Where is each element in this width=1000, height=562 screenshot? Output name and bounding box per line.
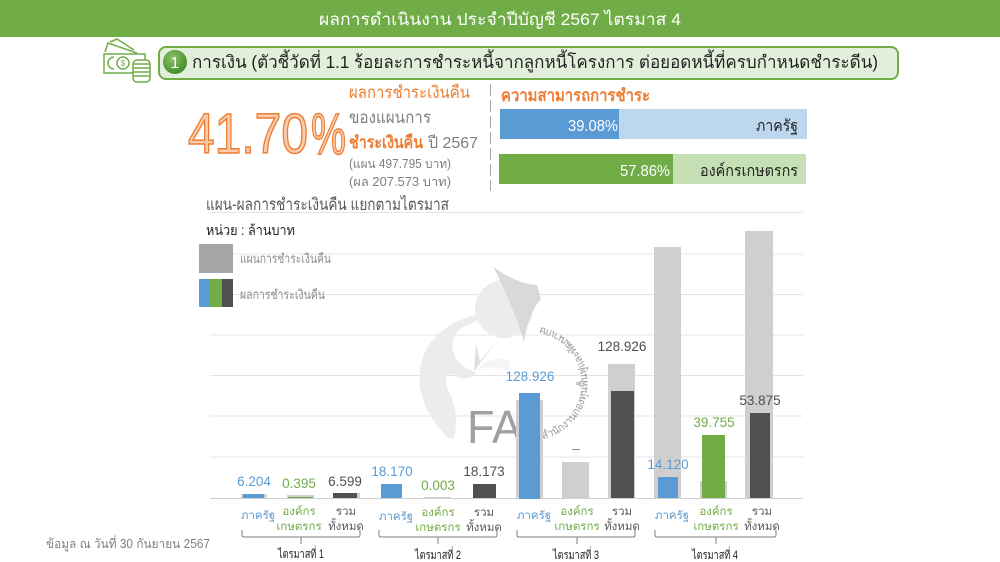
header banner [0, 0, 1000, 37]
bar chart: quarter 1: 6.204 [237, 474, 271, 489]
watermark logo [420, 266, 590, 453]
bar chart: quarter 1: 6.599 [328, 474, 362, 489]
legend: ผลการชำระเงินคืน [240, 287, 325, 302]
repayment summary text: (ผล 207.573 บาท) [349, 175, 451, 189]
axis labels: quarter 2: ภาครัฐ [379, 511, 413, 523]
bar chart: quarter 3: – [572, 441, 580, 456]
axis labels: quarter 3: รวม [612, 506, 632, 518]
number badge [163, 50, 187, 74]
legend: แผนการชำระเงินคืน [240, 251, 331, 266]
header banner: ผลการดำเนินงาน ประจำปีบัญชี 2567 ไตรมาส 4 [319, 9, 681, 29]
bar chart: quarter 3: 128.926 [506, 369, 554, 384]
axis labels: quarter 2: เกษตรกร [415, 522, 461, 534]
bar: public sector 39.08%: 39.08% [568, 118, 618, 135]
icon: money and coins [104, 39, 150, 82]
axis labels: quarter 4: องค์กร [699, 504, 733, 518]
bar chart: quarter 4: 14.120 [647, 457, 689, 472]
axis labels: quarter 4: ภาครัฐ [655, 510, 689, 522]
axis labels: quarter 1 [241, 504, 364, 533]
quarter names: ไตรมาสที่ 1 [277, 545, 324, 561]
bar chart: quarter 4 [647, 231, 781, 498]
axis labels: quarter 4 [655, 504, 780, 533]
bar chart: quarter 2: 18.170 [371, 464, 413, 479]
bar chart: quarter 3 [506, 339, 646, 499]
axis labels: quarter 2 [379, 505, 502, 534]
quarter names: ไตรมาสที่ 2 [414, 546, 461, 562]
chart title: แผน-ผลการชำระเงินคืน แยกตามไตรมาส [206, 195, 449, 214]
panel: repayment ability: ความสามารถการชำระ [501, 86, 650, 105]
axis labels: quarter 1: เกษตรกร [276, 521, 322, 533]
section title box: การเงิน (ตัวชี้วัดที่ 1.1 ร้อยละการชำระหนี้จากลูกหนี้โครงการ ต่อยอดหนี้ที่ครบกำหนดชำระดีน) [192, 49, 878, 73]
axis labels: quarter 3: องค์กร [560, 504, 594, 518]
quarter names [277, 545, 738, 562]
legend [199, 244, 331, 307]
axis labels: quarter 2: องค์กร [421, 505, 455, 519]
bar chart: quarter 1: 0.395 [282, 476, 316, 491]
quarter names: ไตรมาสที่ 4 [691, 546, 738, 562]
bar: public sector 39.08% [500, 109, 807, 139]
repayment summary text: ผลการชำระเงินคืน [349, 83, 470, 102]
axis labels: quarter 1: องค์กร [282, 504, 316, 518]
quarter names: ไตรมาสที่ 3 [552, 546, 599, 562]
bar chart: quarter 4: 39.755 [693, 415, 735, 430]
axis labels: quarter 4: รวม [752, 506, 772, 518]
bar: farmer organisations 57.86%: 57.86% [620, 163, 670, 180]
axis labels: quarter 4: เกษตรกร [693, 521, 739, 533]
bar: farmer organisations 57.86% [499, 154, 806, 184]
axis labels: quarter 3 [517, 504, 640, 533]
bar chart: quarter 1 [237, 474, 362, 498]
section title box [159, 47, 898, 79]
axis labels: quarter 3: ทั้งหมด [604, 518, 640, 533]
unit label: หน่วย : ล้านบาท [206, 222, 295, 238]
big percentage: % [311, 102, 346, 167]
data date note: ข้อมูล ณ วันที่ 30 กันยายน 2567 [46, 535, 210, 552]
bar chart: quarter 3: 128.926 [598, 339, 646, 354]
axis labels: quarter 3: ภาครัฐ [517, 510, 551, 522]
axis labels: quarter 2: ทั้งหมด [466, 519, 502, 534]
axis labels: quarter 3: เกษตรกร [554, 521, 600, 533]
axis labels: quarter 1: ภาครัฐ [241, 510, 275, 522]
bar chart: quarter 2: 18.173 [463, 464, 505, 479]
watermark logo: สำนักงานกองทุนฟื้นฟูและพัฒนาเกษตรกร [540, 327, 590, 439]
axis labels: quarter 4: ทั้งหมด [744, 518, 780, 533]
bar chart: quarter 4: 53.875 [739, 393, 781, 408]
bar chart: quarter 2 [371, 464, 505, 498]
repayment summary text: ปี 2567 [428, 134, 478, 152]
repayment summary text: (แผน 497.795 บาท) [349, 157, 451, 171]
big percentage: 41.70 [188, 102, 308, 166]
repayment summary text: ของแผนการ [349, 108, 431, 127]
panel: repayment ability [499, 86, 807, 184]
bar: public sector 39.08%: ภาครัฐ [756, 118, 798, 135]
quarter brackets and labels [242, 530, 776, 544]
axis labels: quarter 2: รวม [474, 507, 494, 519]
bar chart: quarter 2: 0.003 [421, 478, 455, 493]
bar: farmer organisations 57.86%: องค์กรเกษตรกร [700, 161, 798, 180]
repayment summary text: ชำระเงินคืน [349, 132, 423, 152]
icon: money and coins: $ [121, 59, 126, 68]
axis labels: quarter 1: ทั้งหมด [328, 518, 364, 533]
repayment summary text [349, 83, 478, 189]
chart gridlines [210, 212, 803, 498]
axis labels: quarter 1: รวม [336, 506, 356, 518]
number badge: 1 [171, 55, 180, 72]
watermark logo: FA [467, 401, 522, 453]
